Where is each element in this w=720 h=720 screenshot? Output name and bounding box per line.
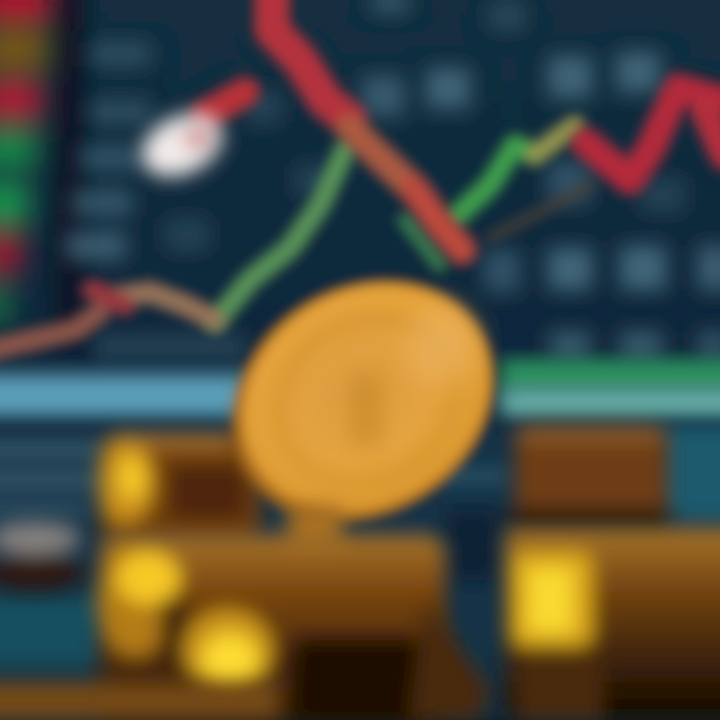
base of left stack xyxy=(0,600,490,720)
line chart: green rising line xyxy=(215,125,575,322)
large gold coin xyxy=(187,235,537,569)
lower right stack xyxy=(505,528,720,720)
horizon band xyxy=(0,360,720,720)
left column: red and green indicators xyxy=(0,0,52,322)
small pale dish at left xyxy=(0,522,83,590)
line chart: red falling line xyxy=(205,0,720,250)
chart grid dots xyxy=(66,0,720,359)
upper left stack xyxy=(98,434,260,540)
upper right stack xyxy=(510,426,670,530)
white marker blob xyxy=(132,102,232,188)
lower background stripes xyxy=(0,426,720,666)
lower left stack xyxy=(97,535,445,720)
right gold stack xyxy=(505,426,720,720)
left gold stack xyxy=(0,434,490,720)
line chart: low multicoloured line xyxy=(0,290,215,350)
